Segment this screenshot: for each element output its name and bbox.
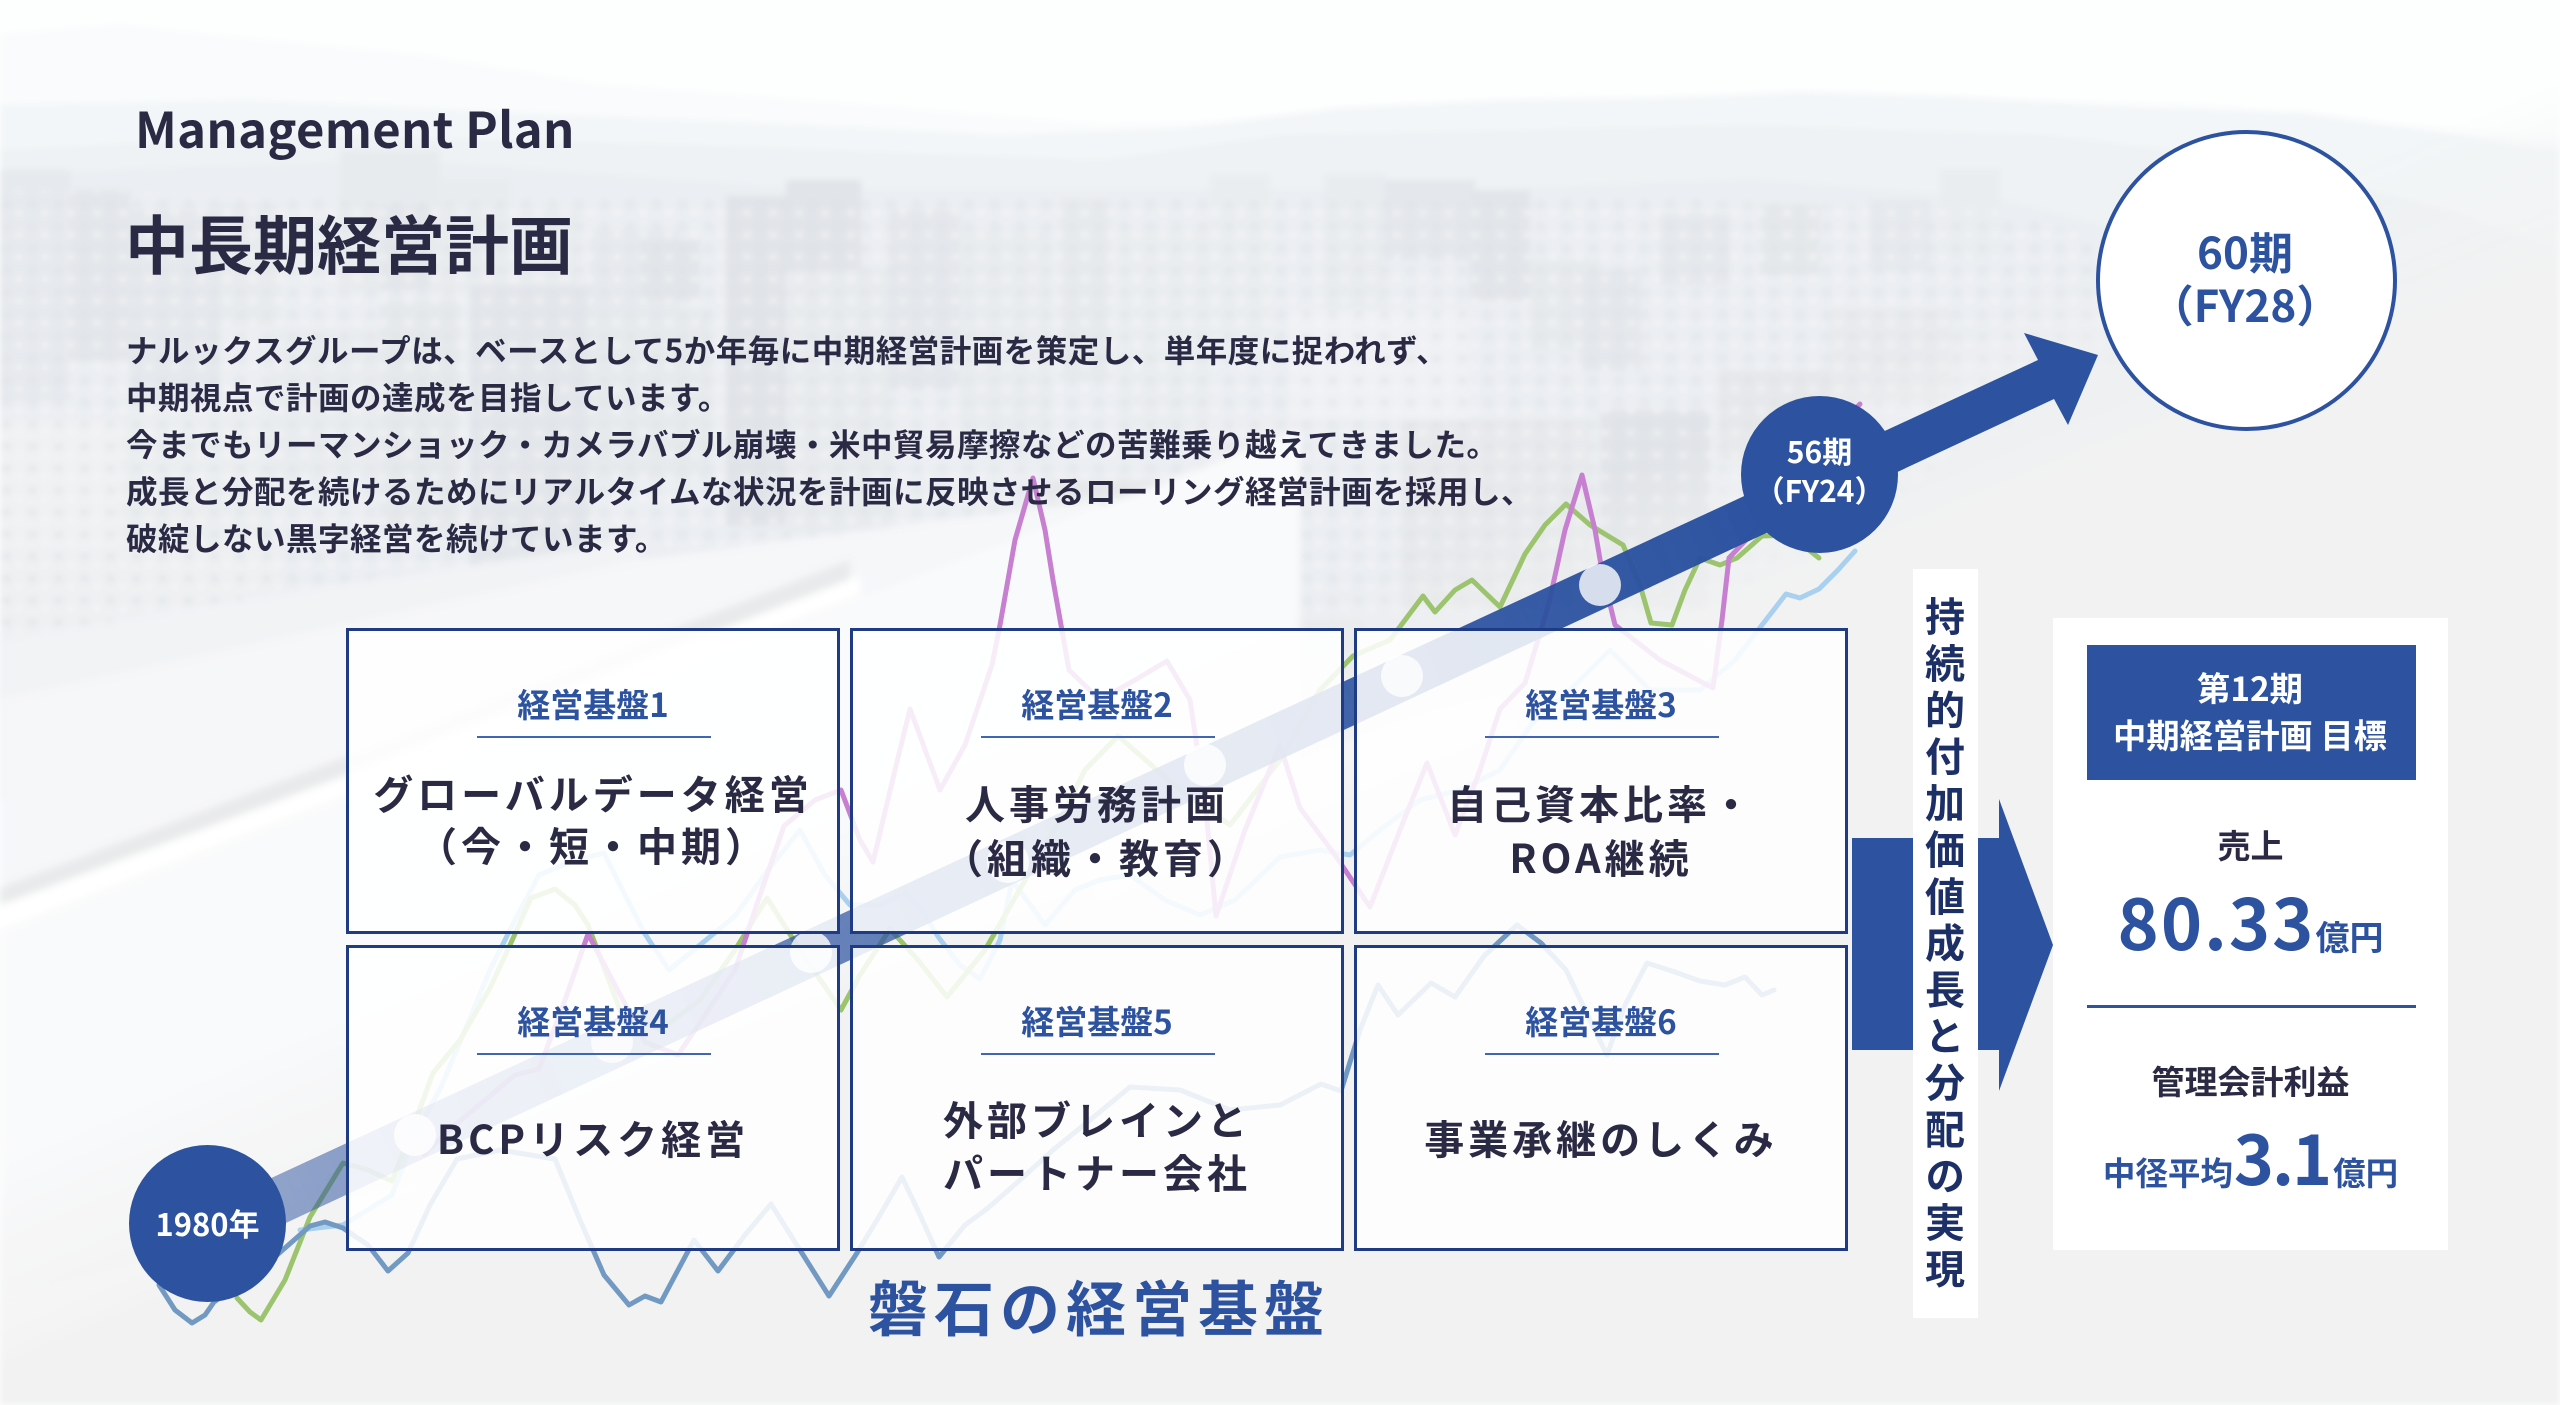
panel: management foundation 6: 事業承継のしくみ xyxy=(1424,1108,1778,1166)
icon: 60th term target circle: （FY28） xyxy=(2150,271,2340,335)
panel: management foundation 6 xyxy=(1354,945,1848,1251)
arrow shaft and head xyxy=(200,333,2098,1263)
caption: solid management foundation: 磐石の経営基盤 xyxy=(868,1262,1330,1349)
sales value: 80.33億円 xyxy=(2118,870,2383,971)
title: 中長期経営計画 xyxy=(125,196,573,288)
icon: 1980 milestone circle: 1980年 xyxy=(155,1200,260,1245)
profit label: 管理会計利益 xyxy=(2152,1056,2350,1104)
panel: management foundation 1: （今・短・中期） xyxy=(417,815,769,873)
intro text block: 破綻しない黒字経営を続けています。 xyxy=(126,514,667,560)
panel: management foundation 2: 人事労務計画 xyxy=(965,773,1229,831)
panel: management foundation 3 xyxy=(1354,628,1848,934)
intro text block: 今までもリーマンショック・カメラバブル崩壊・米中貿易摩擦などの苦難乗り越えてきました。 xyxy=(126,420,1499,466)
intro text block xyxy=(126,326,1533,560)
panel: management foundation 1 xyxy=(346,628,840,934)
panel: management foundation 2: （組織・教育） xyxy=(943,827,1251,885)
panel header: 中期経営計画 目標 xyxy=(2113,709,2387,758)
panel: management foundation 2: 経営基盤2 xyxy=(1021,679,1173,727)
intro text block: ナルックスグループは、ベースとして5か年毎に中期経営計画を策定し、単年度に捉われず、 xyxy=(126,326,1448,372)
heading: Management Plan: Management Plan xyxy=(135,92,575,163)
panel: management foundation 3: 経営基盤3 xyxy=(1525,679,1677,727)
panel header: 第12期 xyxy=(2197,662,2303,711)
vertical banner: sustainable value growth: 持続的付加価値成長と分配の実現 xyxy=(1916,596,1974,1295)
panel: management foundation 5 xyxy=(850,945,1344,1251)
icon: 60th term target circle xyxy=(2096,130,2397,431)
panel: management foundation 1: 経営基盤1 xyxy=(517,679,669,727)
panel: management foundation 5: 外部ブレインと xyxy=(943,1089,1251,1147)
intro text block: 中期視点で計画の達成を目指しています。 xyxy=(126,373,730,419)
panel: management foundation 6: 経営基盤6 xyxy=(1525,996,1677,1044)
line: blue series xyxy=(159,925,1774,1323)
intro text block: 成長と分配を続けるためにリアルタイムな状況を計画に反映させるローリング経営計画を採用し、 xyxy=(126,467,1533,513)
panel: management foundation 4: 経営基盤4 xyxy=(517,996,669,1044)
milestone dots xyxy=(394,564,1621,1156)
line: green series xyxy=(237,504,1819,1320)
panel: management foundation 5: 経営基盤5 xyxy=(1021,996,1173,1044)
icon: 56th term milestone circle xyxy=(1741,396,1898,553)
panel: management foundation 2 xyxy=(850,628,1344,934)
panel: management foundation 4: BCPリスク経営 xyxy=(437,1108,749,1166)
sales label: 売上 xyxy=(2218,820,2284,868)
icon: 56th term milestone circle: （FY24） xyxy=(1754,467,1885,511)
panel: management foundation 4 xyxy=(346,945,840,1251)
line: light blue series xyxy=(300,551,1855,1230)
profit value: 中径平均3.1億円 xyxy=(2103,1106,2398,1205)
panel: management foundation 3: 自己資本比率・ xyxy=(1447,773,1755,831)
icon: 60th term target circle: 60期 xyxy=(2197,218,2293,282)
panel: management foundation 1: グローバルデータ経営 xyxy=(373,763,813,821)
panel: management foundation 5: パートナー会社 xyxy=(943,1142,1251,1200)
divider xyxy=(2087,1005,2416,1008)
icon: 1980 milestone circle xyxy=(129,1145,286,1302)
panel: management foundation 3: ROA継続 xyxy=(1509,827,1693,885)
icon: 56th term milestone circle: 56期 xyxy=(1787,428,1852,472)
line: magenta series xyxy=(424,404,1860,1154)
panel: 12th term plan targets xyxy=(2053,618,2448,1250)
panel header xyxy=(2087,645,2416,780)
